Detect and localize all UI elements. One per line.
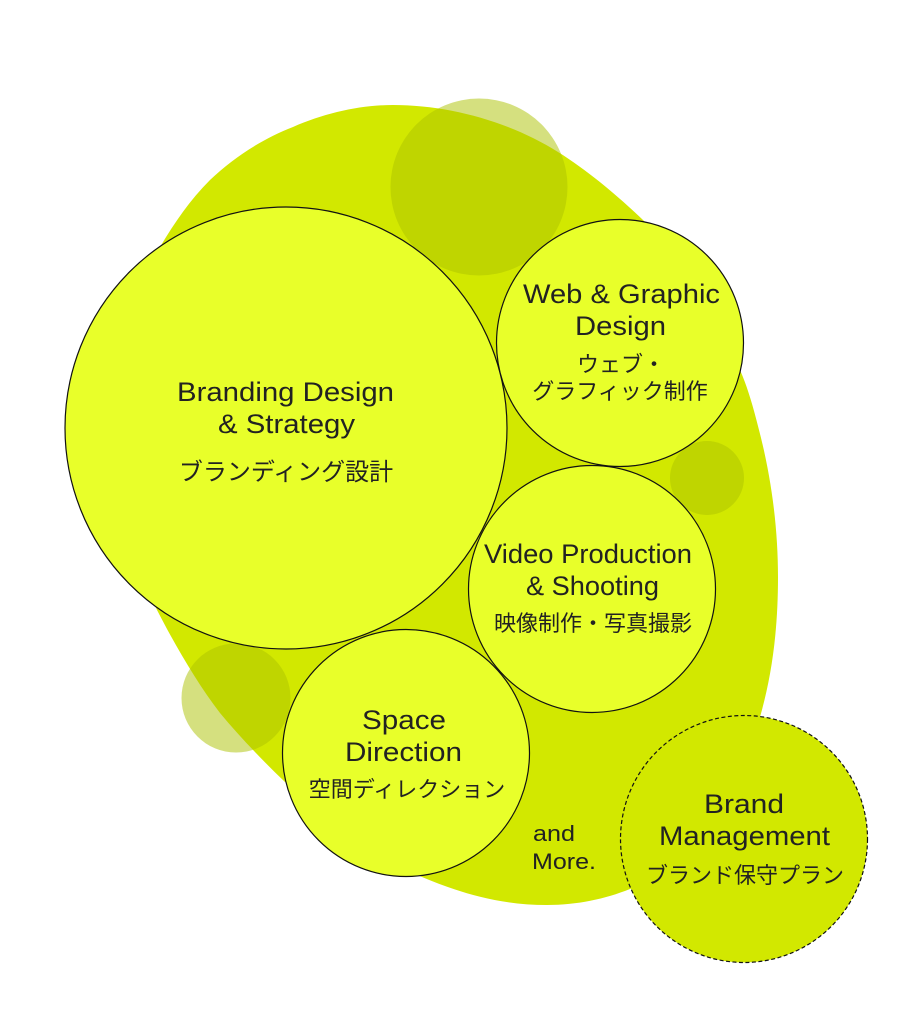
- service circle: Brand Management (dashed): Brand: [704, 789, 784, 819]
- service circle: Space Direction: Space: [362, 705, 446, 735]
- service circle: Brand Management (dashed): Management: [659, 821, 831, 851]
- service circle: Web & Graphic Design: ウェブ・: [577, 352, 665, 377]
- large background blob: [115, 105, 778, 905]
- service circle: Branding Design & Strategy: Branding Design: [177, 377, 394, 407]
- service circle: Brand Management (dashed): [620, 716, 868, 962]
- service circle: Space Direction: [282, 630, 530, 876]
- service circle: Web & Graphic Design: Design: [575, 311, 666, 341]
- service circle: Video Production & Shooting: 映像制作・写真撮影: [494, 611, 692, 636]
- service circle: Branding Design & Strategy: & Strategy: [218, 409, 356, 439]
- service circle: Brand Management (dashed): ブランド保守プラン: [646, 863, 844, 888]
- text: and More.: and: [533, 821, 575, 846]
- text: and More.: [532, 821, 596, 874]
- service circle: Video Production & Shooting: & Shooting: [526, 571, 659, 601]
- service circle: Web & Graphic Design: グラフィック制作: [532, 379, 708, 404]
- service circle: Web & Graphic Design: Web & Graphic: [523, 279, 720, 309]
- service circle: Branding Design & Strategy: [65, 207, 507, 649]
- text: and More.: More.: [532, 849, 596, 874]
- service circle: Space Direction: Direction: [345, 737, 462, 767]
- service circle: Web & Graphic Design: [496, 220, 744, 466]
- service circle: Video Production & Shooting: Video Production: [484, 539, 692, 569]
- decorative translucent circle: top: [390, 98, 568, 276]
- decorative translucent circle: right: [670, 441, 744, 515]
- decorative translucent circle: bottom left: [182, 644, 290, 752]
- service circle: Video Production & Shooting: [468, 466, 716, 712]
- service circle: Branding Design & Strategy: ブランディング設計: [179, 459, 393, 486]
- service circle: Space Direction: 空間ディレクション: [309, 777, 505, 802]
